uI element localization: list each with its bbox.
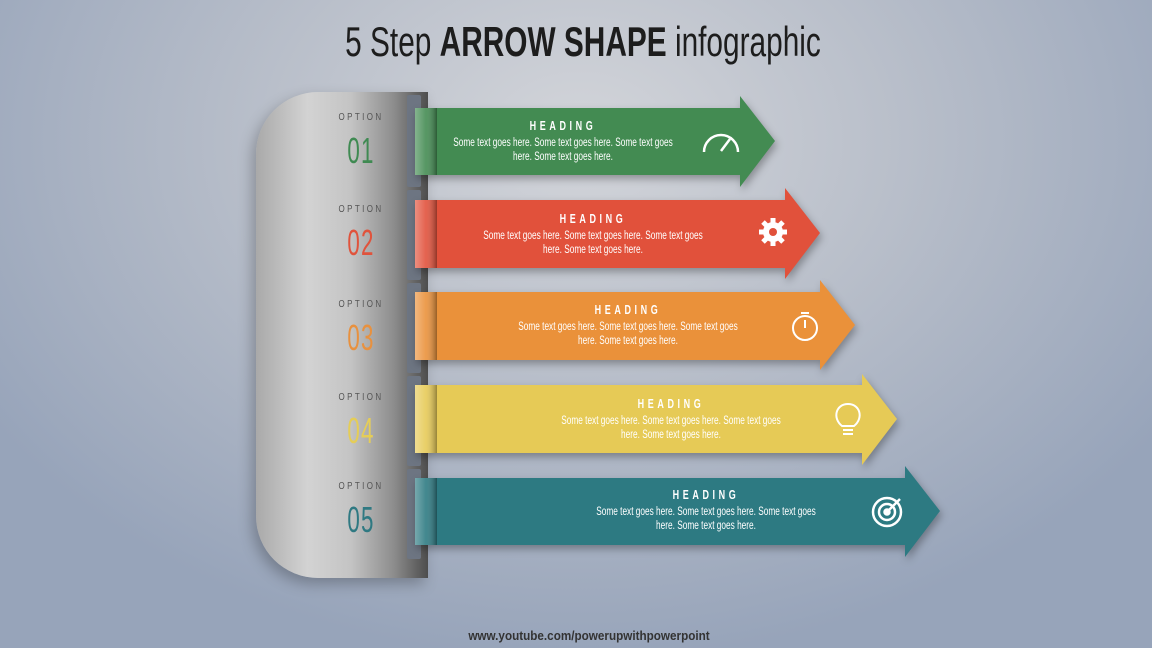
option 01: OPTION — [338, 112, 384, 123]
title: 5 Step ARROW SHAPE infographic — [345, 18, 821, 65]
text block 5: Some text goes here. Some text goes here. Some text goes here. Some text goes here. — [596, 506, 816, 532]
option 04 — [338, 392, 384, 451]
option 05: 05 — [347, 499, 375, 540]
arrow 2 — [415, 188, 820, 279]
option 01 — [338, 112, 384, 171]
icon: gear — [759, 218, 787, 246]
option 04: OPTION — [338, 392, 384, 403]
option labels — [338, 112, 384, 540]
arrow 1 — [415, 96, 775, 187]
option 05: OPTION — [338, 481, 384, 492]
text block 2: HEADING — [560, 212, 626, 226]
text block 1: HEADING — [530, 119, 596, 133]
text block 3 — [518, 303, 738, 347]
text block 4: HEADING — [638, 397, 704, 411]
text block 4: Some text goes here. Some text goes here. Some text goes here. Some text goes here. — [561, 415, 781, 441]
option 04: 04 — [347, 410, 375, 451]
icon: target — [873, 498, 901, 526]
option 05 — [338, 481, 384, 540]
text block 2: Some text goes here. Some text goes here. Some text goes here. Some text goes here. — [483, 230, 703, 256]
text block 5 — [596, 488, 816, 532]
option 03: OPTION — [338, 299, 384, 310]
option 01: 01 — [347, 130, 375, 171]
option 03 — [338, 299, 384, 358]
arrow 3 — [415, 280, 855, 370]
option 02: OPTION — [338, 204, 384, 215]
text block 3: Some text goes here. Some text goes here. Some text goes here. Some text goes here. — [518, 321, 738, 347]
option 03: 03 — [347, 317, 375, 358]
option 02 — [338, 204, 384, 263]
text block 2 — [483, 212, 703, 256]
option 02: 02 — [347, 222, 375, 263]
icon: speedometer — [704, 135, 738, 152]
text block 1: Some text goes here. Some text goes here. Some text goes here. Some text goes here. — [453, 137, 673, 163]
text block 3: HEADING — [595, 303, 661, 317]
cylinder panel — [256, 92, 428, 578]
arrow 4 — [415, 374, 897, 465]
text block 5: HEADING — [673, 488, 739, 502]
text block 4 — [561, 397, 781, 441]
icon: stopwatch — [793, 313, 817, 340]
footer: www.youtube.com/powerupwithpowerpoint — [468, 628, 710, 643]
icon: light bulb — [836, 404, 860, 434]
arrow 5 — [415, 466, 940, 557]
text block 1 — [453, 119, 673, 163]
